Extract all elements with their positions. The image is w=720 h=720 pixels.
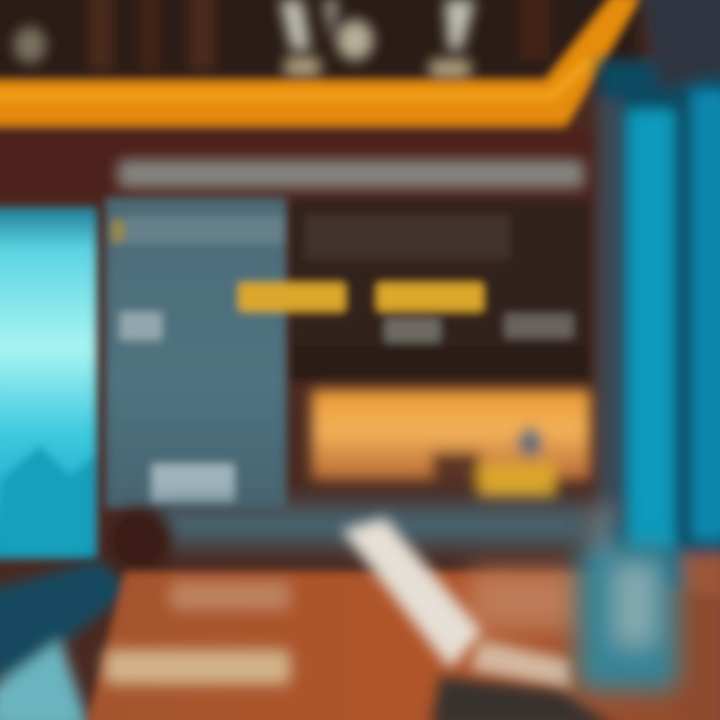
dark band below shelf <box>0 130 600 200</box>
white paper strip <box>342 518 482 668</box>
dark round object <box>108 508 172 572</box>
panel: dark content <box>290 200 590 381</box>
wooden table <box>85 570 720 720</box>
heading bar <box>118 160 584 188</box>
right teal column <box>598 0 720 720</box>
trophies on shelf <box>14 0 475 78</box>
glass bottle <box>578 505 678 690</box>
lower-left teal floor <box>0 560 130 720</box>
left cyan screen <box>0 208 96 558</box>
orange chart panel <box>312 390 590 498</box>
paper corner <box>470 640 570 690</box>
panel: slate sidebar <box>106 198 286 508</box>
top shelf backdrop <box>0 0 640 80</box>
dark keyboard <box>430 676 620 720</box>
yellow stat bars <box>238 282 484 312</box>
lower slate strip <box>150 505 590 545</box>
orange shelf band <box>0 0 642 128</box>
